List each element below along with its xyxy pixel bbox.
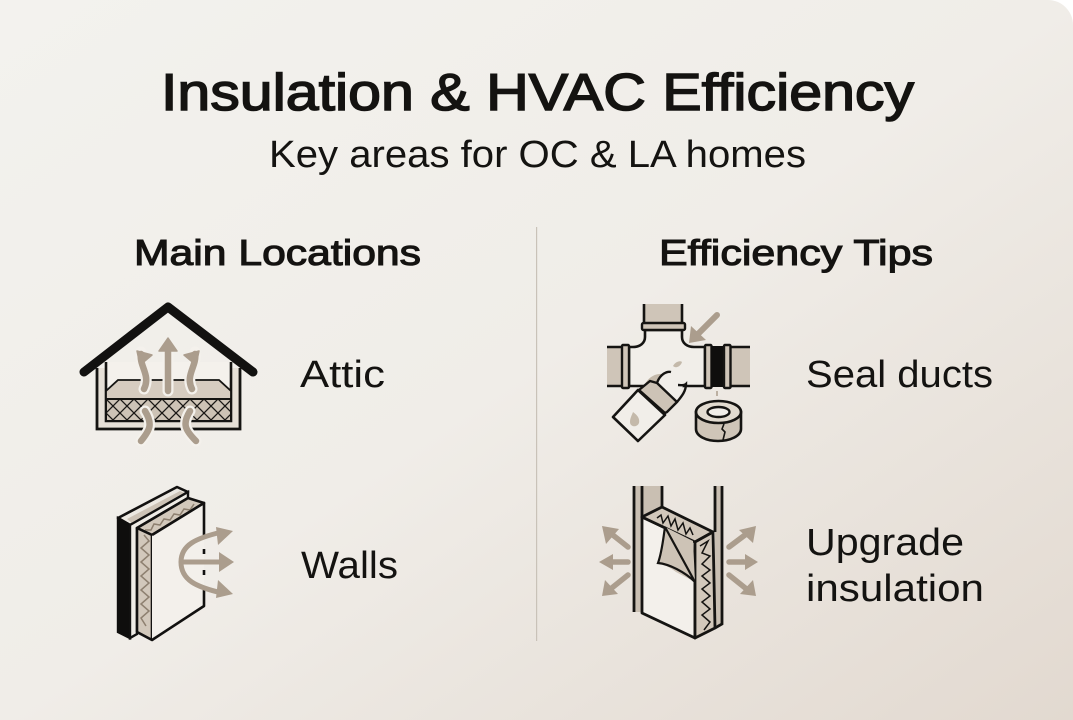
label: walls: Walls bbox=[301, 545, 398, 587]
heading: main locations: Main Locations bbox=[134, 232, 421, 273]
label: seal ducts: Seal ducts bbox=[806, 354, 993, 396]
center divider bbox=[536, 227, 537, 641]
heading: efficiency tips: Efficiency Tips bbox=[659, 232, 933, 273]
subtitle: Key areas for OC & LA homes bbox=[269, 134, 806, 176]
icon: upgrade insulation bbox=[599, 486, 758, 638]
title: Insulation & HVAC Efficiency bbox=[161, 64, 914, 122]
icon: seal ducts bbox=[607, 304, 750, 441]
label: upgrade insulation: Upgrade bbox=[806, 522, 964, 564]
label: upgrade insulation: insulation bbox=[806, 568, 984, 610]
label: attic: Attic bbox=[300, 354, 385, 396]
label: upgrade insulation bbox=[806, 522, 984, 610]
icon: walls bbox=[118, 487, 234, 640]
icon: attic bbox=[84, 307, 253, 441]
caulk nozzle bbox=[639, 372, 686, 413]
